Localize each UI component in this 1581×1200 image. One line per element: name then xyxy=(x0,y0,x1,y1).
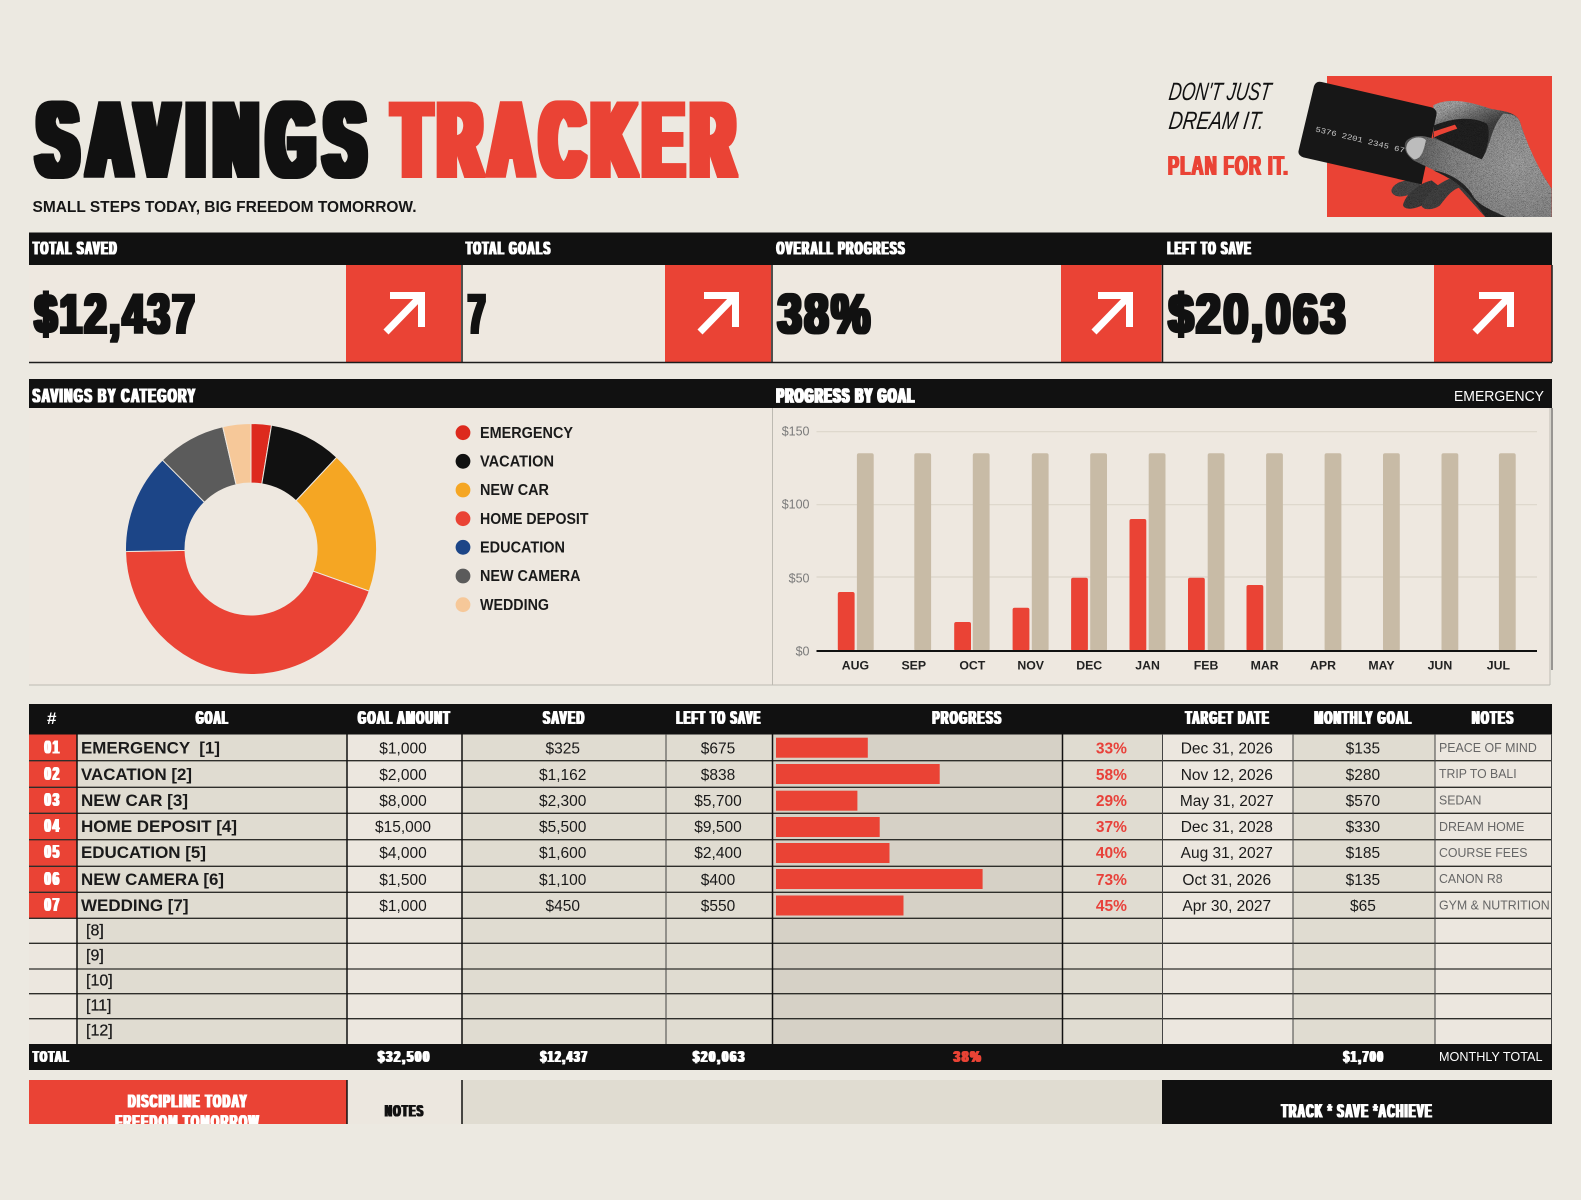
row 5: EDUCATION [5] xyxy=(81,843,206,862)
table header: TARGET DATE xyxy=(1186,707,1270,728)
row 4: $5,500 xyxy=(539,819,587,836)
section header bar xyxy=(29,379,1552,408)
row 6 xyxy=(44,869,1503,889)
table header: MONTHLY GOAL xyxy=(1314,707,1412,728)
month labels: JAN xyxy=(1135,658,1160,672)
row 3: NEW CAR [3] xyxy=(81,791,188,810)
row 2 xyxy=(44,764,1517,784)
row 7 xyxy=(44,895,1550,915)
goals table xyxy=(29,704,1552,1070)
table totals: TOTAL xyxy=(33,1049,70,1066)
row 6: 06 xyxy=(44,869,61,889)
row 1: $1,000 xyxy=(379,740,427,758)
table header: LEFT TO SAVE xyxy=(676,707,762,728)
table totals xyxy=(29,1044,1552,1070)
row 7: WEDDING [7] xyxy=(81,896,188,915)
row 5 xyxy=(44,842,1528,862)
footer notes label xyxy=(384,1105,424,1116)
row 2: $838 xyxy=(701,767,735,784)
row 1: $135 xyxy=(1346,740,1380,758)
row 4: $15,000 xyxy=(375,819,431,836)
arrow tile: total goals xyxy=(665,265,771,362)
row 7: $1,000 xyxy=(379,898,427,915)
month labels: JUL xyxy=(1487,658,1511,672)
row 2: TRIP TO BALI xyxy=(1439,766,1517,781)
footer notes field xyxy=(462,1080,1162,1124)
KPI card: total goals: 7 xyxy=(468,282,487,345)
month labels: MAY xyxy=(1368,658,1395,672)
section header bar: SAVINGS BY CATEGORY xyxy=(32,386,196,408)
y axis labels: $0 xyxy=(796,644,810,658)
row 7: 07 xyxy=(44,895,61,915)
KPI card: total saved xyxy=(29,265,462,362)
row 2: 58% xyxy=(1096,767,1127,784)
slogan: PLAN FOR IT. xyxy=(1168,150,1289,181)
KPI card: total goals xyxy=(463,265,772,362)
row 5: $2,400 xyxy=(694,845,742,862)
table header: # xyxy=(47,709,57,728)
empty rows: [11] xyxy=(86,998,112,1014)
section header bar: PROGRESS BY GOAL xyxy=(776,386,916,408)
footer message: track save achieve: TRACK * SAVE *ACHIEVE xyxy=(1282,1102,1433,1123)
footer message: discipline xyxy=(29,1080,346,1124)
illustration: hand holding a black card on red square: 5376 2201 2345 67 xyxy=(1314,126,1405,156)
row 1: EMERGENCY [1] xyxy=(81,738,220,758)
y axis labels: $150 xyxy=(782,424,810,438)
row 6: $135 xyxy=(1346,872,1380,889)
row 1: $675 xyxy=(701,740,735,758)
row 5: $4,000 xyxy=(379,845,427,862)
row 4 xyxy=(44,816,1525,836)
y axis labels: $100 xyxy=(782,498,810,512)
illustration: hand holding a black card on red square xyxy=(1298,76,1552,219)
card xyxy=(1298,82,1437,184)
KPI header bar: TOTAL GOALS xyxy=(466,238,552,258)
row 6: NEW CAMERA [6] xyxy=(81,870,224,889)
row 3: SEDAN xyxy=(1439,792,1481,808)
month labels: NOV xyxy=(1017,658,1045,672)
row 2: 02 xyxy=(44,764,61,784)
row 7: GYM & NUTRITION xyxy=(1439,898,1550,912)
footer message: discipline: DISCIPLINE TODAY xyxy=(128,1092,248,1112)
slogan xyxy=(1167,78,1289,181)
legend: NEW CAMERA xyxy=(480,568,580,585)
row 6: $400 xyxy=(701,872,736,889)
legend: NEW CAR xyxy=(480,482,549,499)
month labels: APR xyxy=(1310,658,1336,672)
donut chart xyxy=(126,424,377,675)
row 6: Oct 31, 2026 xyxy=(1182,872,1271,889)
empty rows: [8] xyxy=(86,922,104,940)
table totals: MONTHLY TOTAL xyxy=(1439,1049,1542,1064)
row 4: 04 xyxy=(44,816,61,836)
row 3: 03 xyxy=(44,790,61,810)
row 2: $2,000 xyxy=(379,767,427,784)
slogan: DREAM IT. xyxy=(1167,107,1266,135)
row 7: $550 xyxy=(701,898,736,915)
table header: GOAL AMOUNT xyxy=(358,707,451,728)
table column fills xyxy=(29,734,1551,1044)
row 3: $570 xyxy=(1346,793,1381,810)
row 6: 73% xyxy=(1096,872,1127,889)
KPI card: total saved: $12,437 xyxy=(34,282,197,345)
row 7: Apr 30, 2027 xyxy=(1182,898,1271,915)
row 1: PEACE OF MIND xyxy=(1439,740,1537,755)
row 5: Aug 31, 2027 xyxy=(1181,845,1273,862)
slogan: DON'T JUST xyxy=(1167,78,1274,106)
table totals: $32,500 xyxy=(378,1049,431,1066)
table header: SAVED xyxy=(543,707,586,728)
row 2: VACATION [2] xyxy=(81,765,192,784)
KPI card: overall progress xyxy=(773,265,1162,362)
legend: EDUCATION xyxy=(480,540,565,556)
month labels: OCT xyxy=(959,658,986,672)
row 4: Dec 31, 2028 xyxy=(1181,819,1273,836)
legend: WEDDING xyxy=(480,597,549,614)
footer notes label: NOTES xyxy=(385,1103,424,1121)
title: TRACKER xyxy=(394,80,743,200)
row 5: 40% xyxy=(1096,845,1127,862)
KPI header bar xyxy=(29,232,1552,265)
KPI card: left to save xyxy=(1163,265,1552,362)
row 3: $5,700 xyxy=(694,793,742,810)
section header bar: EMERGENCY xyxy=(1454,389,1544,405)
row 1: 33% xyxy=(1096,740,1127,758)
row 2: $280 xyxy=(1346,767,1381,784)
row 5: 05 xyxy=(44,842,61,862)
month labels: SEP xyxy=(901,658,926,672)
row 3: $8,000 xyxy=(379,793,427,810)
table header: NOTES xyxy=(1472,707,1514,728)
row 6: $1,100 xyxy=(539,872,587,889)
KPI header bar: OVERALL PROGRESS xyxy=(776,238,906,258)
row 2: Nov 12, 2026 xyxy=(1181,767,1273,784)
empty rows xyxy=(86,922,113,1040)
progress bars xyxy=(776,738,983,916)
arrow tile: overall progress xyxy=(1061,265,1162,362)
row 4: 37% xyxy=(1096,819,1127,836)
row 4: DREAM HOME xyxy=(1439,819,1525,834)
KPI header bar: LEFT TO SAVE xyxy=(1168,238,1252,258)
row 6: CANON R8 xyxy=(1439,871,1503,886)
legend xyxy=(456,425,589,614)
row 1: Dec 31, 2026 xyxy=(1181,740,1273,758)
row 4: $330 xyxy=(1346,819,1381,836)
arrow tile: total saved xyxy=(346,265,461,362)
KPI header bar: TOTAL SAVED xyxy=(33,238,118,258)
row 3: May 31, 2027 xyxy=(1180,793,1274,810)
month labels: AUG xyxy=(842,658,869,672)
row 1: $325 xyxy=(545,740,580,758)
row 7: $450 xyxy=(545,898,580,915)
title: SAVINGS xyxy=(38,80,375,200)
empty rows: [10] xyxy=(86,972,113,990)
table header: GOAL xyxy=(196,707,229,728)
panel: savings by category xyxy=(29,408,772,685)
row 6: $1,500 xyxy=(379,872,427,889)
month labels: FEB xyxy=(1194,658,1219,672)
footer message: discipline: FREEDOM TOMORROW xyxy=(116,1112,260,1132)
row 5: $1,600 xyxy=(539,845,587,862)
table header: PROGRESS xyxy=(932,707,1002,728)
row 2: $1,162 xyxy=(539,767,586,784)
row 7: 45% xyxy=(1096,898,1127,915)
subtitle: SMALL STEPS TODAY, BIG FREEDOM TOMORROW. xyxy=(32,199,416,216)
month labels xyxy=(842,658,1511,672)
y axis labels: $50 xyxy=(789,571,810,585)
panel: progress by goal xyxy=(29,408,1552,685)
table totals: $20,063 xyxy=(693,1049,746,1066)
KPI card: left to save: $20,063 xyxy=(1168,282,1348,345)
row 5: $185 xyxy=(1346,845,1380,862)
footer message: track save achieve xyxy=(1162,1080,1552,1124)
month labels: MAR xyxy=(1251,658,1279,672)
row 5: COURSE FEES xyxy=(1439,845,1528,860)
goal bars xyxy=(857,453,1516,651)
table totals: $1,700 xyxy=(1344,1049,1384,1066)
row 1 xyxy=(44,738,1537,758)
row 3: $2,300 xyxy=(539,793,587,810)
arrow tile: left to save xyxy=(1434,265,1552,362)
footer strip xyxy=(29,1080,1552,1124)
KPI card: overall progress: 38% xyxy=(778,282,872,345)
legend: EMERGENCY xyxy=(480,425,574,442)
empty rows: [12] xyxy=(86,1022,113,1040)
y axis labels xyxy=(782,424,810,658)
legend: VACATION xyxy=(480,454,554,470)
month labels: DEC xyxy=(1076,658,1102,672)
row 1: 01 xyxy=(44,738,61,758)
row 4: $9,500 xyxy=(694,819,742,836)
row 3 xyxy=(44,790,1481,810)
month labels: JUN xyxy=(1428,658,1452,672)
row 4: HOME DEPOSIT [4] xyxy=(81,817,237,836)
row 3: 29% xyxy=(1096,793,1127,810)
row 7: $65 xyxy=(1350,898,1376,915)
table header xyxy=(29,704,1552,734)
table totals: $12,437 xyxy=(540,1049,588,1066)
saved bars xyxy=(838,519,1263,651)
empty rows: [9] xyxy=(86,948,104,964)
table totals: 38% xyxy=(954,1049,982,1066)
legend: HOME DEPOSIT xyxy=(480,511,589,528)
